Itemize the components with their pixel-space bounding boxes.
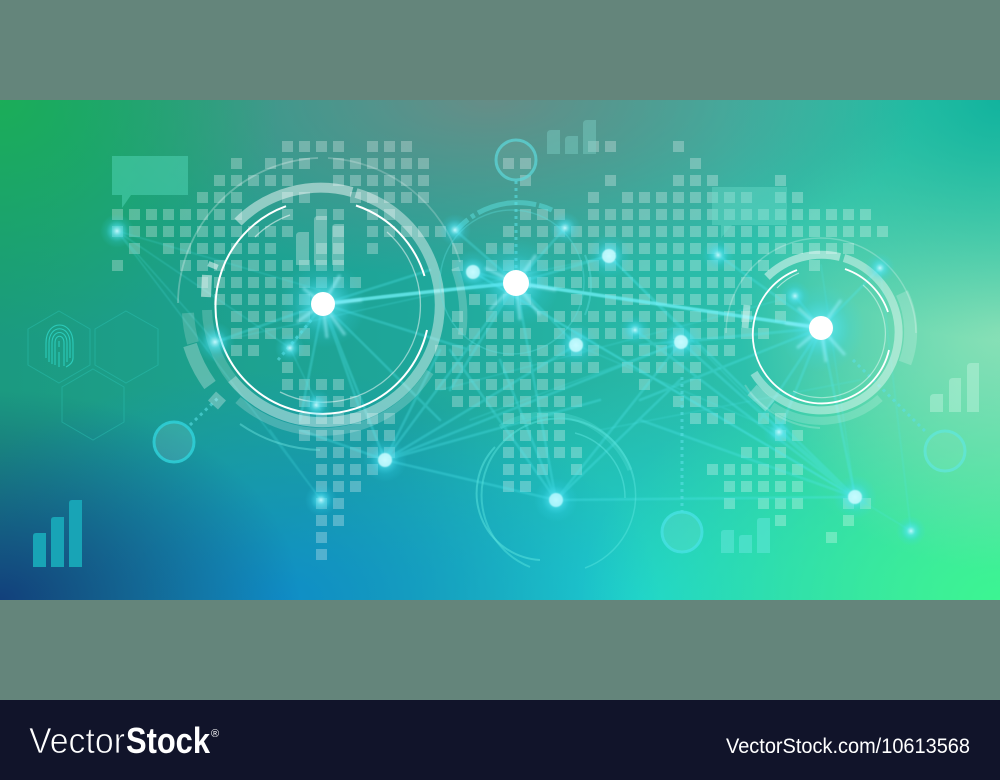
circle node: right (925, 431, 965, 471)
hexagon: empty right (95, 311, 158, 383)
speech bubble: left (112, 156, 188, 208)
ring: bottom (477, 414, 636, 568)
footer logo: ® (211, 728, 219, 740)
footer image id: VectorStock.com/10613568 (726, 735, 970, 758)
bar icon: bottom left (33, 500, 82, 567)
network connection lines (117, 228, 911, 531)
node: centre hub (472, 239, 560, 327)
glowing nodes (100, 212, 926, 546)
speech bubble: right (712, 187, 787, 238)
bar icon: top centre (547, 120, 596, 154)
node glow: small network points (100, 212, 926, 546)
icon: fingerprint (46, 325, 73, 367)
ring: middle (440, 203, 591, 354)
ring: left HUD (178, 158, 463, 450)
hexagon: fingerprint cell (28, 311, 90, 383)
footer logo: Stock (126, 720, 211, 761)
ring: right HUD (726, 238, 916, 428)
dotted world map (112, 146, 888, 554)
node: left hub (279, 260, 367, 348)
footer bar (0, 700, 1000, 780)
bar icon: inside left ring (296, 216, 344, 265)
node: right hub (777, 284, 865, 372)
bar icon: right (930, 363, 979, 412)
panel: gradient banner background (0, 100, 1000, 600)
dotted connectors (190, 181, 927, 512)
bar icon: bottom right (721, 518, 770, 553)
circle node: bottom (662, 512, 702, 552)
footer logo: Vector (29, 720, 125, 761)
footer logo (29, 720, 219, 761)
circle node: top (496, 140, 536, 180)
circle node: left (154, 422, 194, 462)
node glow: medium network points (363, 234, 877, 522)
hexagon: empty bottom (62, 369, 124, 440)
